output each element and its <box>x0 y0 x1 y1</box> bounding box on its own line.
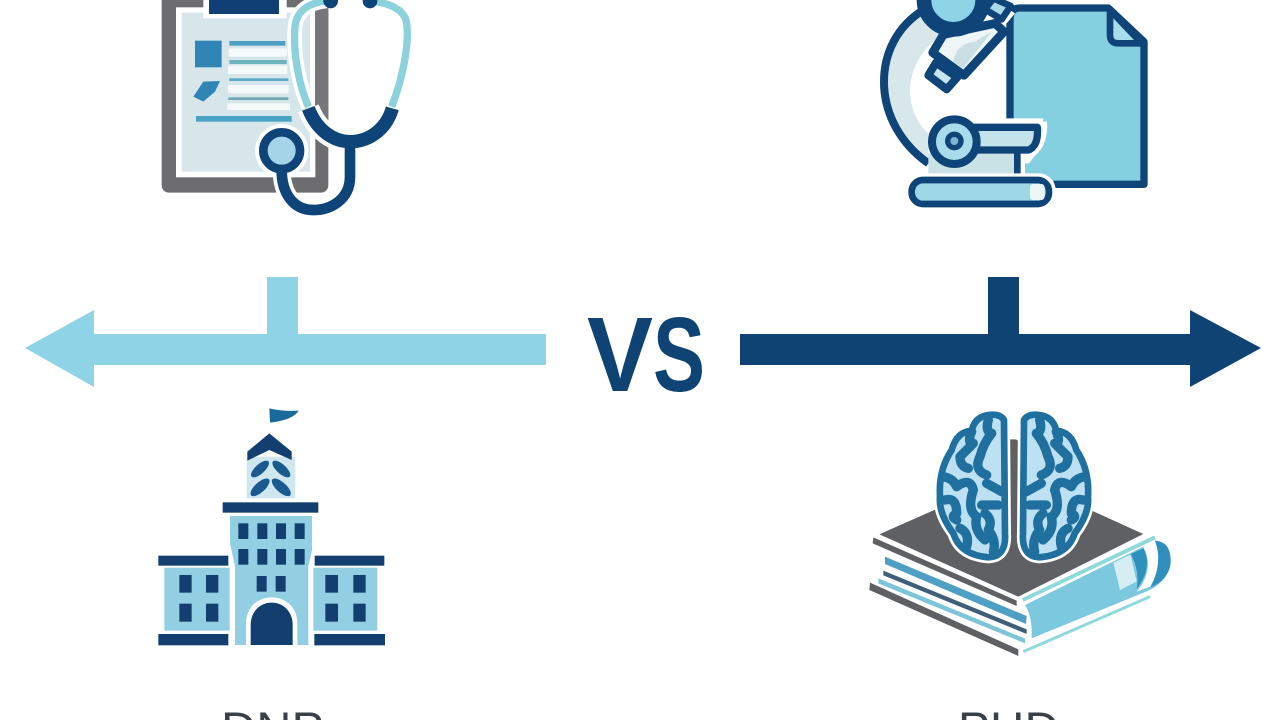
document <box>993 3 1144 192</box>
heading: VS <box>587 296 705 414</box>
icon: university building <box>158 408 385 645</box>
heading: VS: S <box>653 296 705 414</box>
left hemisphere <box>940 415 1005 557</box>
icon: brain on book <box>869 415 1171 656</box>
microscope base <box>909 177 1052 207</box>
right hemisphere <box>1023 415 1088 557</box>
book <box>869 475 1171 656</box>
microscope pillar and stage <box>928 119 1045 178</box>
icon: clipboard with stethoscope <box>162 0 407 210</box>
arrow: right, navy <box>740 277 1261 387</box>
heading: VS: V <box>587 296 653 414</box>
icon: microscope and document <box>884 0 1144 207</box>
microscope tube <box>924 0 1011 89</box>
microscope arm <box>884 10 940 163</box>
brain <box>940 415 1088 573</box>
arrow: left, light blue <box>25 277 546 387</box>
